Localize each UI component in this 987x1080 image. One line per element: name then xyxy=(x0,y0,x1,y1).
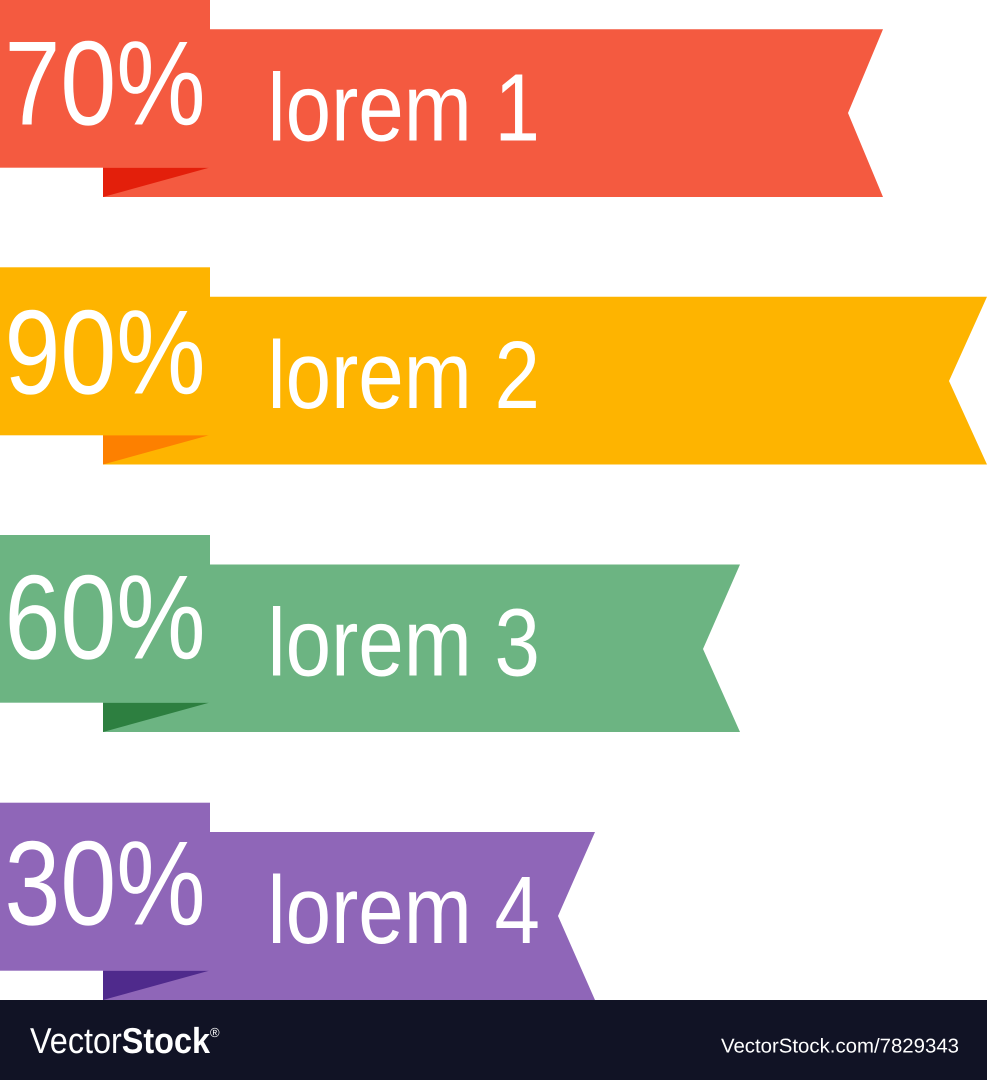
registered mark: ® xyxy=(210,1025,220,1040)
fold shadow 1 xyxy=(103,168,209,197)
ribbon body 3 xyxy=(103,564,740,732)
ribbon 4: lorem 4, 30% xyxy=(0,803,595,1000)
ribbon label 2: lorem 2 xyxy=(268,322,540,429)
fold shadow 2 xyxy=(103,435,209,464)
ribbon body 4 xyxy=(103,832,595,1000)
percent value 2: 90% xyxy=(4,286,206,420)
percent tab 4 xyxy=(0,803,210,971)
fold shadow 4 xyxy=(103,971,209,1000)
percent tab 1 xyxy=(0,0,210,168)
fold shadow 3 xyxy=(103,703,209,732)
footer logo: VectorStock xyxy=(30,1020,211,1061)
ribbon body 1 xyxy=(103,29,883,197)
ribbon 1: lorem 1, 70% xyxy=(0,0,883,197)
percent tab 3 xyxy=(0,535,210,703)
ribbon 2: lorem 2, 90% xyxy=(0,267,987,464)
ribbon body 2 xyxy=(103,297,987,464)
percent tab 2 xyxy=(0,267,210,435)
ribbon label 4: lorem 4 xyxy=(268,857,540,964)
percent value 3: 60% xyxy=(4,550,206,684)
footer bar xyxy=(0,1000,987,1080)
ribbon 3: lorem 3, 60% xyxy=(0,535,740,732)
footer URL: VectorStock.com/7829343 xyxy=(721,1036,959,1058)
ribbon label 3: lorem 3 xyxy=(268,590,540,696)
percent value 4: 30% xyxy=(4,816,206,950)
percent value 1: 70% xyxy=(4,16,206,150)
ribbon label 1: lorem 1 xyxy=(268,54,540,162)
